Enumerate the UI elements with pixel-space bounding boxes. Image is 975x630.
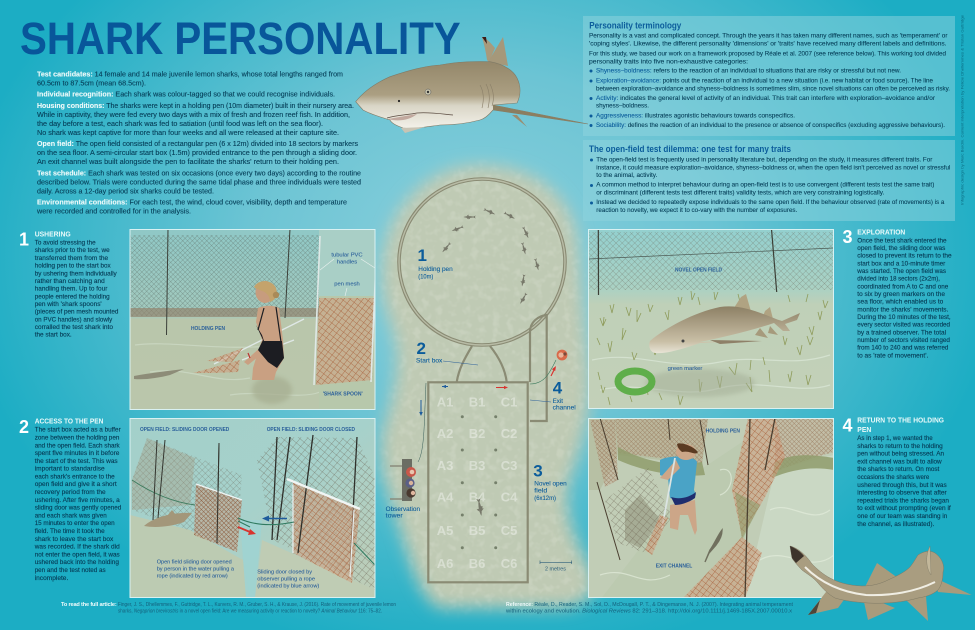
step 2 text: access to the pen: 15 minutes to enter the open — [35, 520, 115, 527]
step 2 text: access to the pen: important to standardise — [35, 466, 105, 473]
text block: study methods: Housing conditions: The sharks were kept in a holding pen (10m diameter) built in their nursery area. — [37, 103, 354, 110]
seagrass — [597, 291, 828, 405]
step 3 text: exploration: from 140 to 240 and was referred — [857, 345, 949, 352]
label 3: novel open field: field — [534, 488, 547, 494]
panel: open-field test dilemma: or discriminant (different tests test different traits) validity tests, which are very constraining logistically. — [596, 189, 884, 196]
panel: personality terminology: shyness–boldness. — [596, 102, 649, 109]
panel: open-field test dilemma: reaction to novelty, we expect it to co-vary with the number of exposures. — [596, 207, 797, 214]
caption: door opened: by person in the water pulling a — [157, 566, 235, 572]
step 4 text: return to the holding pen: interesting to observe that after — [857, 490, 947, 497]
label 3: novel open field — [533, 462, 567, 502]
step 1 text: ushering: the start box. — [35, 332, 72, 339]
grid labels: A6 — [437, 556, 453, 571]
caption: door closed — [257, 569, 319, 589]
left sliding door — [194, 484, 242, 552]
panel: open-field test dilemma — [583, 140, 955, 221]
step 4 text: return to the holding pen: exit channel was built to allow — [857, 458, 942, 465]
text block: study methods: Test candidates: 14 female and 14 male juvenile lemon sharks, whose total lengths ranged from — [37, 72, 343, 79]
panel: personality terminology: Activity: indicates the general level of activity of an individual. This trait can interfere with exploration–avoidance and/or — [596, 95, 936, 102]
grid labels: B3 — [469, 458, 485, 473]
grid labels: C5 — [501, 523, 517, 538]
step 2 text: access to the pen: 2 — [19, 417, 29, 437]
label 1: holding pen: 1 — [418, 246, 427, 265]
grid labels: A2 — [437, 426, 453, 441]
label: holding pen: HOLDING PEN — [191, 326, 225, 332]
holding pen circle — [399, 179, 565, 345]
step 1 text: ushering: handling them. Up to four — [35, 286, 108, 293]
observation tower — [390, 459, 416, 501]
panel: open-field test dilemma: instance, it could measure exploration–avoidance, shyness–boldness or, when the open field isn't perceived as novel or stressful — [596, 164, 951, 171]
step 3 text: exploration: by a trained observer. The total — [857, 329, 947, 336]
step 4 text: return to the holding pen: repeated trials the sharks began — [857, 497, 949, 504]
step 1 text: ushering: USHERING — [35, 230, 71, 239]
panel: personality terminology: Exploration–avoidance: points out the reaction of an individual to a new situation (i.e. new habitat or food source). The line — [596, 78, 933, 85]
right mesh — [257, 437, 375, 590]
step 1 text: ushering: rather than catching and — [35, 278, 105, 285]
citation: full article: To read the full article: — [61, 602, 117, 608]
text block: study methods: described below. Trials were conducted during the same tidal phase and three individuals were tested — [37, 180, 361, 186]
caption: door closed: observer pulling a rope — [257, 576, 315, 582]
label 1: holding pen: Holding pen — [418, 267, 453, 273]
step 2 text: access to the pen: not enter the open field, it was — [35, 551, 120, 558]
citation: full article: sharks, Negaprion brevirostris in a novel open field: Are we measuring activity or reaction to novelty? Animal Behaviour 116: 75–82. — [118, 609, 382, 615]
illustration: return to the holding pen — [588, 418, 834, 600]
left net — [605, 467, 672, 553]
step 1 text: ushering — [19, 230, 119, 339]
left mesh — [132, 438, 242, 533]
step 3 text: exploration: every sector visited was recorded — [857, 322, 950, 329]
illustration: lemon shark head-on, top — [356, 37, 588, 133]
step 1 text: ushering: pen with 'shark spoons' — [35, 301, 102, 308]
back wall — [588, 418, 708, 490]
swimmer's water ripple — [252, 376, 292, 404]
step 2 text: access to the pen: was recorded. If the shark did — [34, 544, 120, 551]
panel: personality terminology: Personality terminology — [589, 19, 682, 30]
step 4 text: return to the holding pen: 4 — [842, 416, 853, 436]
step 4 text: return to the holding pen: the channel, as illustrated). — [857, 521, 934, 528]
step 3 text: exploration: start box and a 10-minute timer — [857, 260, 946, 267]
step 4 text: return to the holding pen: pen without being stressed. An — [857, 451, 944, 458]
step 2 text: access to the pen: ushering. After five minutes, a — [35, 497, 120, 504]
text block: study methods: were recorded and controlled for in the analysis. — [36, 208, 191, 216]
label 2: start box: Start box — [416, 358, 442, 364]
label: holding pen: HOLDING PEN — [706, 428, 740, 434]
label 3: novel open field: 3 — [533, 462, 543, 481]
sector markers — [461, 415, 497, 549]
step 4 text: return to the holding pen: ushered through this, but it was — [857, 482, 947, 489]
step 2 text: access to the pen: incomplete. — [35, 575, 68, 582]
illustration: ushering in the holding pen — [130, 229, 377, 410]
caption: door opened — [157, 559, 235, 579]
step 3 text: exploration: open field, the sliding door was — [857, 245, 946, 252]
panel: personality terminology: 'coping styles'. Likewise, the different personality 'dimensions' or 'traits' have received many different labels and definitions. — [589, 40, 947, 48]
label 4: exit channel: 4 — [553, 378, 563, 397]
grid labels: A5 — [437, 523, 453, 538]
text block: study methods: the day before a test, each shark was fed to satiation (until food was left on the sea floor). — [37, 121, 323, 128]
small shark in pen — [134, 369, 184, 379]
text block: study methods: on the sea floor. A semi-circular start box (1.5m) provided entrance to the pen through a sliding door. — [37, 150, 357, 157]
step 2 text: access to the pen: ushered back into the holding — [35, 559, 119, 566]
step 1 text: ushering: (pieces of pen mesh mounted — [35, 309, 119, 316]
step 3 text: exploration: number of sectors visited ranged — [857, 337, 950, 344]
step 2 text: access to the pen: pen and the test noted as — [35, 567, 106, 574]
label: novel open field: NOVEL OPEN FIELD — [675, 267, 722, 273]
text block: study methods — [36, 72, 361, 216]
step 4 text: return to the holding pen: As in step 1, we wanted the — [857, 435, 933, 442]
caption: door closed: Sliding door closed by — [257, 569, 312, 575]
label 4: exit channel: channel — [553, 406, 576, 412]
label: tubular PVC handles: tubular PVC — [331, 252, 363, 258]
step 2 text: access to the pen: zone between the holding pen — [35, 434, 120, 442]
panel: personality terminology: Aggressiveness: illustrates agonistic behaviours towards conspecifics. — [596, 112, 795, 119]
text block: study methods: 60.5cm to 87.5cm (mean 68.5cm). — [37, 81, 146, 88]
text block: study methods: An exit channel was built alongside the pen to facilitate the sharks' return to their holding pen. — [37, 159, 339, 166]
panel: personality terminology: between exploration–avoidance and shyness–boldness is sometimes slim, since novel situations can often be perceived as risky. — [596, 86, 950, 93]
grid labels: A3 — [437, 458, 453, 473]
shark spoons — [193, 319, 304, 373]
step 3 text: exploration: divided into 18 sectors (2x2m), — [857, 276, 940, 283]
resting shark — [144, 510, 192, 527]
caustics — [592, 355, 830, 392]
step 3 text: exploration: coordinated from A to C and one — [857, 283, 949, 290]
text block: study methods: No shark was kept captive for more than four weeks and all were released at their capture site. — [37, 130, 339, 137]
step 1 text: ushering: by ushering them individually — [35, 270, 117, 277]
step 2 text: access to the pen: recovery period from the — [35, 489, 106, 496]
step 4 text: return to the holding pen: to exit without prompting (even if — [857, 505, 951, 512]
label: door opened heading: OPEN FIELD: SLIDING DOOR OPENED — [140, 427, 229, 433]
right sliding door — [293, 482, 360, 583]
grid labels: C3 — [501, 458, 517, 473]
grid labels: C6 — [501, 556, 517, 571]
step 4 text: return to the holding pen: sharks to return to the holding — [857, 443, 943, 450]
label 1: holding pen: (10m) — [418, 274, 433, 280]
step 2 text: access to the pen: and the open field. Each shark — [35, 442, 120, 449]
panel: personality terminology: personality traits into five non-exhaustive categories: — [589, 58, 748, 65]
caption: door opened: rope (indicated by red arrow) — [157, 573, 228, 579]
label: observation tower: tower — [386, 514, 403, 520]
label: exit channel: EXIT CHANNEL — [656, 563, 693, 569]
label: observation tower — [386, 507, 420, 520]
illustration: sliding door opened and closed — [130, 418, 375, 598]
step 1 text: ushering: To avoid stressing the — [35, 239, 96, 246]
start box and open field fence — [428, 315, 547, 582]
design credit: Infographic design by Marc Bardin. Content interpretation by Félicie Dhellemmes & Tristan Guttridge — [960, 15, 964, 205]
arrows — [238, 527, 250, 532]
step 1 text: ushering: holding pen to the start box — [35, 263, 111, 270]
grid labels: B1 — [469, 394, 485, 410]
ropes — [238, 518, 375, 565]
map: experimental enclosure — [386, 179, 576, 582]
inset: pen mesh detail — [313, 230, 374, 393]
text block: study methods: Open field: The open field consisted of a rectangular pen (6 x 12m) divided into 18 sectors by markers — [37, 141, 359, 148]
grid labels: B6 — [469, 556, 485, 571]
grid labels: B5 — [469, 523, 485, 538]
step 3 text: exploration: to six by green markers on the — [857, 291, 945, 298]
illustration: novel open field — [588, 229, 834, 409]
text block: study methods: daily. Across a 12-day period six sharks could be tested. — [37, 188, 214, 196]
green marker — [618, 371, 652, 392]
step 3 text: exploration: During the 10 minutes of the test, — [857, 314, 951, 321]
panel: open-field test dilemma: The open-field test dilemma: one test for many traits — [589, 143, 791, 154]
person at exit channel — [557, 350, 567, 360]
step 1 text: ushering: sharks prior to the test, we — [35, 247, 110, 254]
step 2 text: access to the pen: The start box acted as a buffer — [35, 427, 121, 434]
step 2 text: access to the pen: each shark's entrance to the — [35, 473, 115, 480]
citation: reference: within ecology and evolution. Biological Reviews 82: 291–318. http://doi.org/10.1111/j.1469-185X.2007.00010.x — [505, 609, 792, 615]
panel: personality terminology: For this study, we based our work on a framework proposed by Réale et al. 2007 (see reference below). This working tool divided — [589, 50, 946, 57]
label: door closed heading: OPEN FIELD: SLIDING DOOR CLOSED — [267, 427, 355, 433]
text block: study methods: Individual recognition: Each shark was colour-tagged so that we could recognise individuals. — [37, 92, 335, 99]
scale bar — [540, 560, 572, 573]
step 2 text: access to the pen: ACCESS TO THE PEN — [35, 417, 103, 426]
label 4: exit channel: Exit — [553, 399, 563, 405]
caption: door opened: Open field sliding door opened — [157, 559, 232, 565]
grid labels: C4 — [501, 490, 518, 504]
panel: open-field test dilemma: to the animal, activity. — [596, 172, 657, 179]
water surface — [600, 440, 745, 600]
map arrows and ropes — [418, 360, 556, 462]
step 3 text: exploration: sea floor, which enabled us to — [857, 299, 944, 306]
caption: door closed: (indicated by blue arrow) — [257, 583, 319, 589]
step 2 text: access to the pen — [19, 417, 122, 582]
panel: personality terminology — [583, 16, 955, 136]
step 1 text: ushering: corralled the test shark into — [35, 324, 113, 331]
step 3 text: exploration: EXPLORATION — [857, 227, 905, 236]
sharks in holding pen — [440, 207, 541, 517]
label: shark spoon: 'SHARK SPOON' — [323, 392, 363, 398]
illustration: lemon shark from above, bottom right — [790, 546, 972, 621]
swimmer — [244, 281, 284, 380]
citation: full article — [61, 602, 396, 615]
step 4 text: return to the holding pen: RETURN TO THE HOLDING — [857, 415, 944, 424]
step 2 text: access to the pen: open field and give it a short — [35, 481, 117, 488]
citation: reference — [505, 602, 793, 615]
grid labels: B4 — [469, 490, 486, 504]
step 1 text: ushering: on PVC handles) and slowly — [35, 316, 113, 323]
step 2 text: access to the pen: field. The time it took the — [35, 528, 105, 535]
grid labels: A4 — [437, 490, 454, 504]
label 2: start box: 2 — [416, 339, 426, 358]
text block: study methods: Environmental conditions: For each test, the wind, cloud cover, visibility, depth and temperature — [37, 200, 347, 206]
panel: open-field test dilemma: Instead we decided to repeatedly expose individuals to the same open field. If the behaviour observed (rate of movements) is a — [596, 199, 945, 206]
citation: full article: Finger, J. S., Dhellemmes, F., Guttridge, T. L., Kurvers, R. M., Gruber, S. H., & Krause, J. (2016). Rate of movement of juvenile lemon — [118, 602, 396, 608]
label 1: holding pen — [418, 246, 453, 280]
label: pen mesh: pen mesh — [334, 282, 360, 288]
scale bar: 2 metres — [545, 567, 567, 573]
step 3 text: exploration — [842, 227, 952, 359]
label: observation tower: Observation — [386, 507, 420, 513]
sand island — [376, 156, 602, 620]
label: green marker: green marker — [668, 366, 702, 372]
step 4 text: return to the holding pen: PEN — [857, 425, 871, 434]
step 2 text: access to the pen: sliding door was gently opened — [35, 505, 122, 512]
caustics — [600, 469, 834, 580]
step 4 text: return to the holding pen: one of our team was standing in — [857, 513, 948, 520]
step 2 text: access to the pen: shark to leave the start box — [35, 536, 114, 543]
step 3 text: exploration: to as 'rate of movement'. — [857, 352, 928, 359]
label: tubular PVC handles: handles — [337, 260, 357, 266]
step 3 text: exploration: monitor the sharks' movements. — [857, 306, 948, 313]
grid labels: B2 — [469, 426, 485, 441]
panel: personality terminology: Personality is a vast and complicated concept. Through the years it has taken many different names, such as 'temperament' or — [589, 32, 948, 40]
step 2 text: access to the pen: spent five minutes in it before — [35, 450, 120, 457]
label 3: novel open field: Novel open — [534, 482, 567, 488]
label 3: novel open field: (6x12m) — [534, 496, 556, 502]
step 3 text: exploration: 3 — [842, 227, 853, 247]
step 4 text: return to the holding pen: occasions the sharks were — [857, 474, 930, 481]
panel: personality terminology: Sociability: defines the reaction of an individual to the presence or absence of conspecifics (excluding aggressive behaviours). — [596, 122, 945, 129]
step 3 text: exploration: Once the test shark entered the — [857, 237, 947, 244]
text block: study methods: While in captivity, they were fed every two days with a mix of fresh and frozen reef fish. In addition, — [37, 112, 350, 119]
text block: study methods: Test schedule: Each shark was tested on six occasions (once every two days) according to the routine — [37, 170, 361, 178]
step 1 text: ushering: people entered the holding — [35, 293, 110, 300]
step 1 text: ushering: 1 — [19, 230, 29, 250]
step 2 text: access to the pen: the start of the test. This was — [35, 458, 118, 465]
step 1 text: ushering: transferred them from the — [35, 255, 109, 262]
grid labels: C1 — [501, 394, 517, 410]
panel: open-field test dilemma: A common method to interpret behaviour during an open-field test is to use convergent (different tests test the same trait) — [596, 182, 934, 189]
shark — [649, 294, 800, 353]
shark shadow — [645, 369, 755, 397]
label 2: start box — [416, 339, 478, 365]
person with shark spoon — [645, 443, 698, 555]
step 4 text: return to the holding pen: the sharks to return. On most — [857, 466, 939, 473]
step 2 text: access to the pen: and each shark was given — [35, 512, 107, 519]
right net wall — [775, 418, 834, 472]
step 3 text: exploration: was started. The open field was — [856, 268, 947, 275]
step 4 text: return to the holding pen — [842, 415, 951, 528]
step 3 text: exploration: closed to prevent its return to the — [857, 253, 952, 260]
grid labels: C2 — [501, 426, 517, 441]
grid labels: A1 — [437, 394, 453, 410]
grid labels — [437, 394, 518, 571]
citation: reference: Reference: Réale, D., Reader, S. M., Sol, D., McDougall, P. T., & Dingemanse, N. J. (2007). Integrating animal temperament — [506, 602, 793, 608]
shark in channel — [705, 530, 722, 562]
panel: open-field test dilemma: The open-field test is frequently used in personality literature but, depending on the study, it measures different traits. For — [596, 156, 933, 163]
panel: personality terminology: Shyness–boldness: refers to the reaction of an individual to situations that are risky or stressful but not new. — [596, 68, 901, 75]
label 4: exit channel — [530, 378, 576, 412]
title: SHARK PERSONALITY — [20, 14, 461, 65]
